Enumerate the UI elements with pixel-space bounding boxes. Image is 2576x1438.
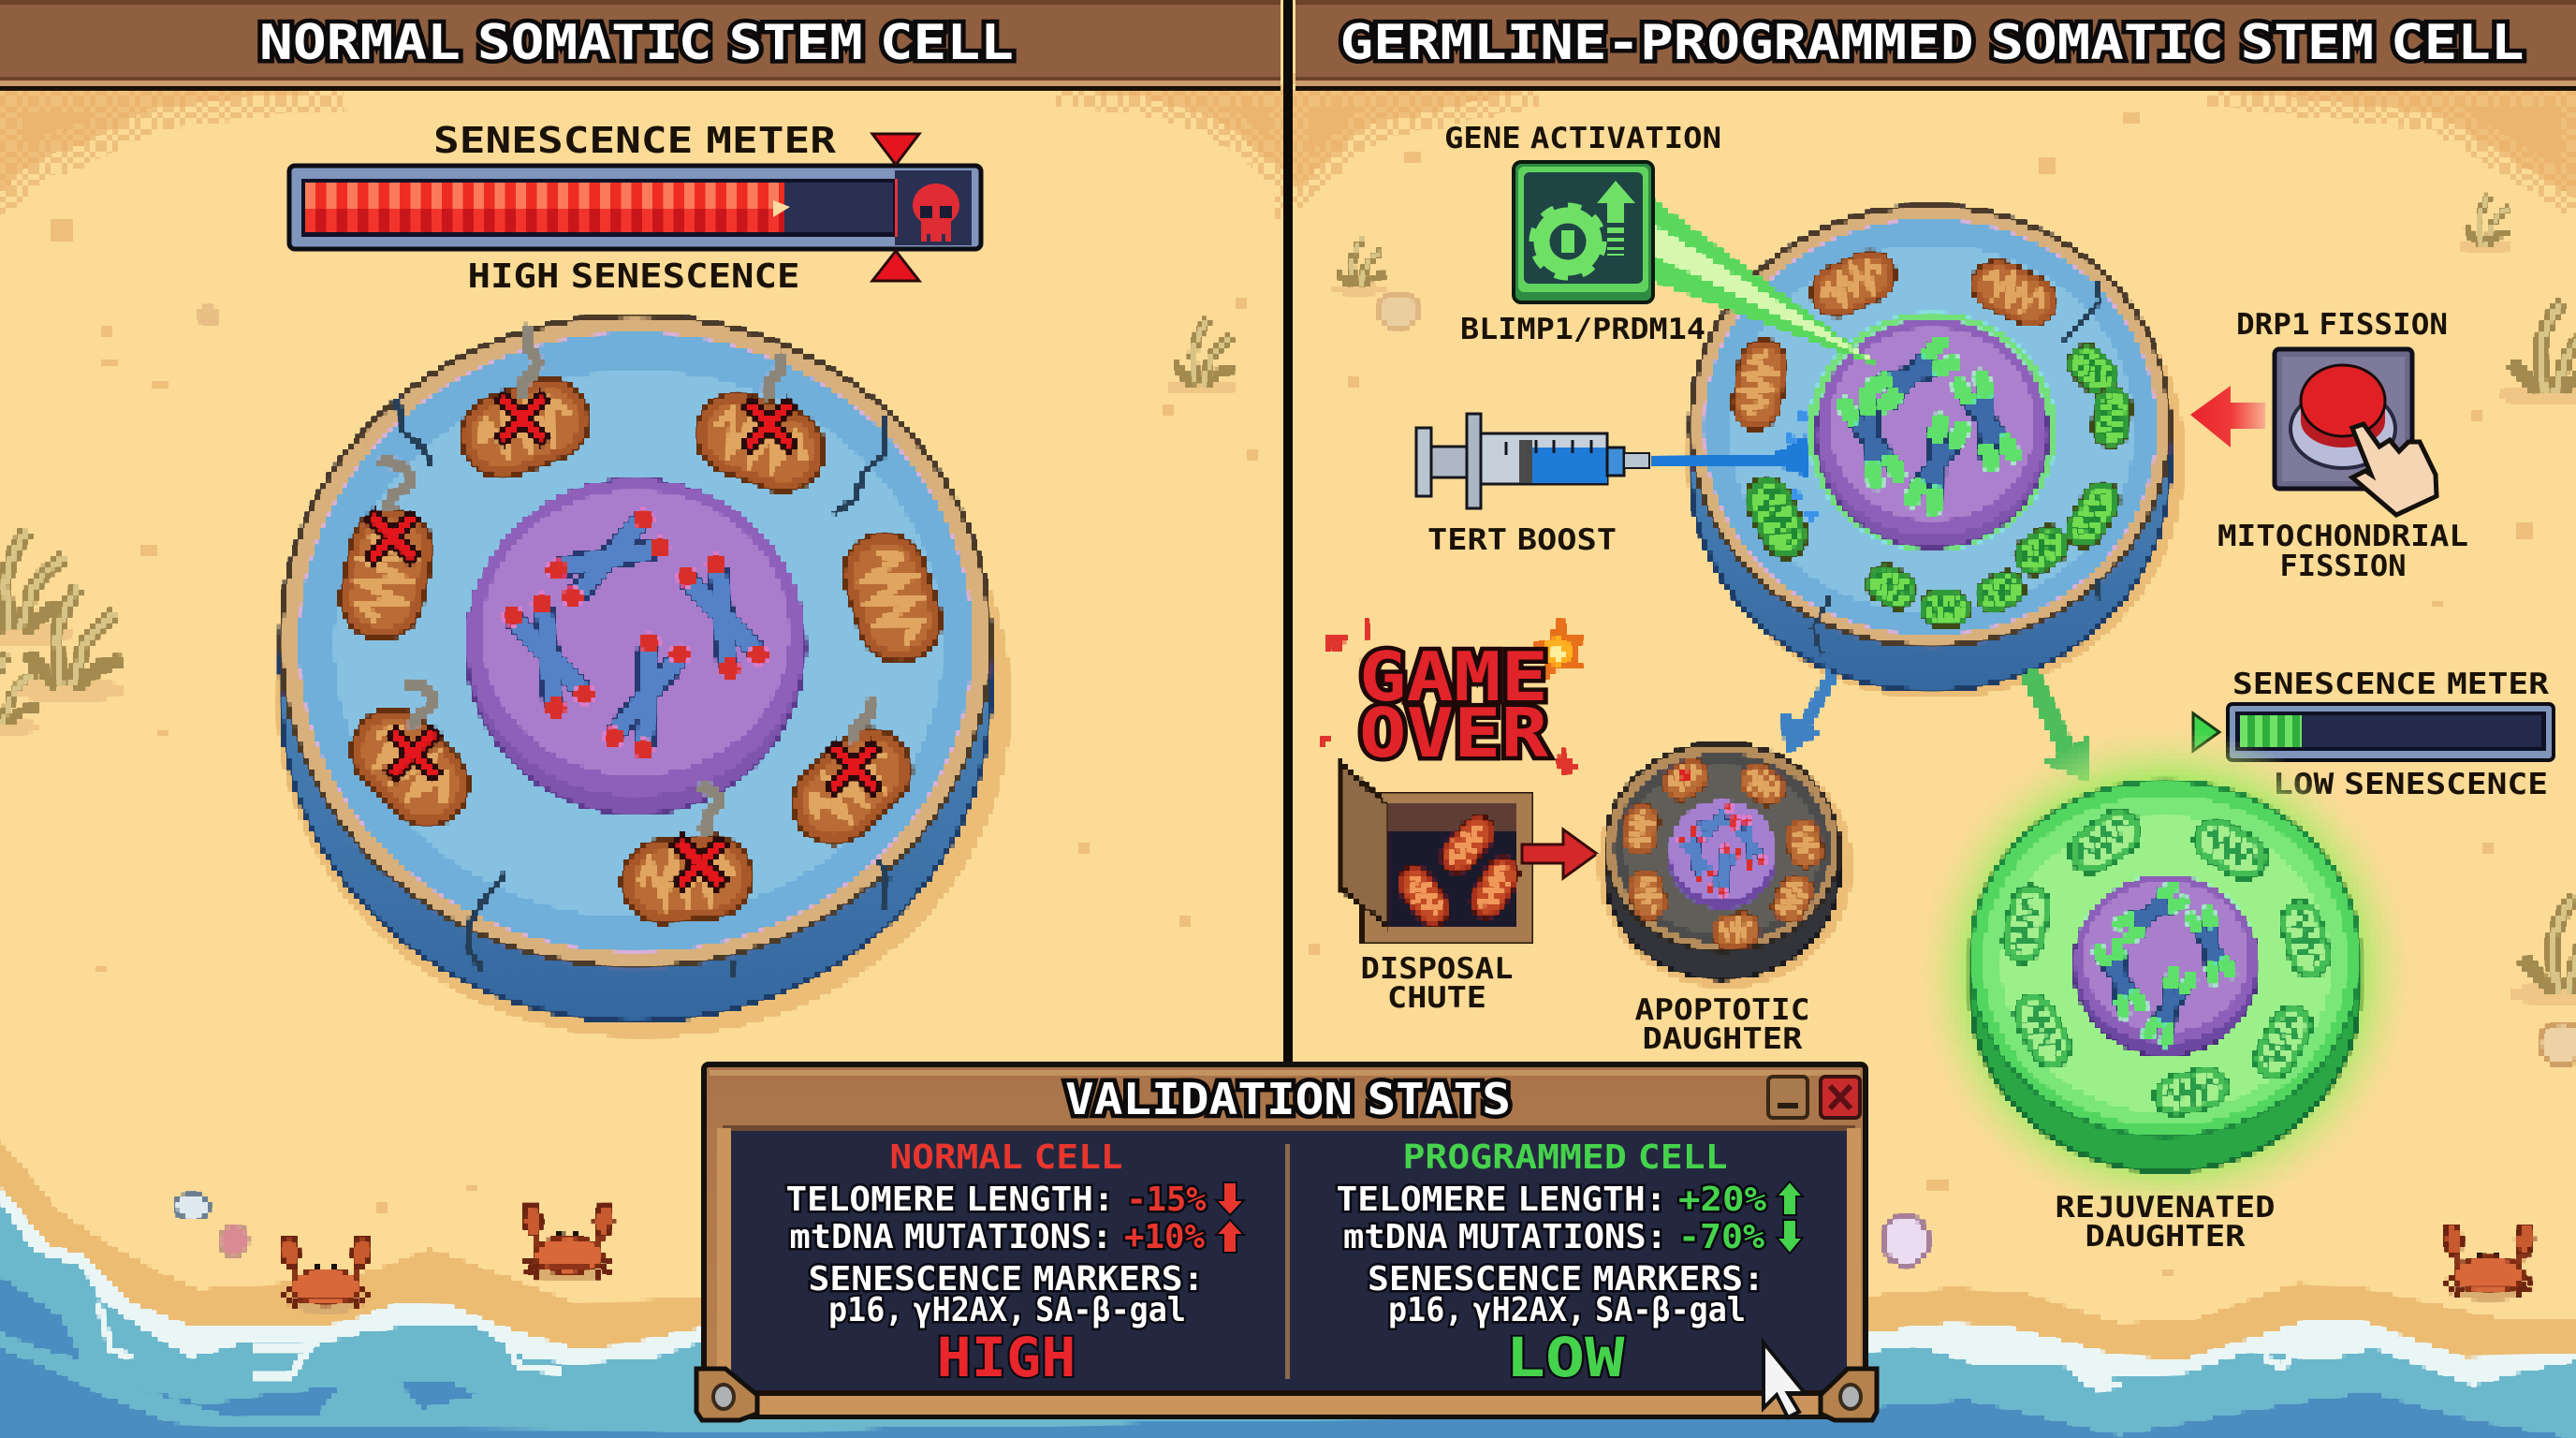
disposal chute: DISPOSAL: [1361, 952, 1513, 986]
game over burst: [1318, 614, 1586, 775]
apoptotic daughter cell: DAUGHTER: [1642, 1022, 1803, 1056]
rejuvenated daughter cell: DAUGHTER: [2086, 1220, 2246, 1254]
membrane cracks: [398, 397, 887, 979]
smoke: [378, 327, 872, 835]
arrow: fission: [2190, 386, 2265, 448]
stats: programmed cell: mtDNA MUTATIONS:: [1343, 1218, 1667, 1256]
chromosomes with long telomeres: [1844, 344, 2013, 508]
arrow: to apoptotic daughter: [1780, 670, 1838, 755]
stats: programmed cell: +20%: [1678, 1181, 1766, 1219]
crabs: [281, 1206, 2533, 1313]
stats: programmed cell: p16, γH2AX, SA-β-gal: [1388, 1291, 1746, 1329]
window buttons: [1768, 1077, 1860, 1118]
icon: TERT syringe: TERT BOOST: [1427, 523, 1617, 557]
senescence meter: low: SENESCENCE METER: [2232, 668, 2549, 701]
chip: [1514, 162, 1653, 302]
liquid stream: [1649, 412, 1817, 521]
icon: DRP1 fission button: [2190, 308, 2468, 583]
stats: normal cell: TELOMERE LENGTH:: [786, 1181, 1114, 1219]
stats: programmed cell: -70%: [1678, 1218, 1764, 1256]
nucleus: [466, 479, 805, 814]
stats: programmed cell: PROGRAMMED CELL: [1402, 1138, 1728, 1177]
stats: normal cell: +10%: [1124, 1218, 1205, 1256]
chromosomes: [499, 505, 772, 762]
corner bolts: [696, 1369, 1877, 1420]
stats: normal cell: SENESCENCE MARKERS:: [809, 1260, 1204, 1299]
grass tufts: [0, 195, 2576, 1005]
mitochondria: [1727, 242, 2133, 626]
stats: programmed cell: LOW: [1505, 1326, 1625, 1389]
stats screen: [731, 1131, 1847, 1390]
marker triangles: [872, 134, 919, 281]
nucleus with glow: [1808, 312, 2056, 551]
stats: normal cell: p16, γH2AX, SA-β-gal: [828, 1291, 1186, 1329]
stats: normal cell: NORMAL CELL: [889, 1138, 1123, 1177]
rejuvenated daughter cell: [1920, 728, 2410, 1254]
senescence meter: low: LOW SENESCENCE: [2273, 768, 2548, 801]
icon: DRP1 fission button: MITOCHONDRIAL: [2217, 520, 2468, 553]
senescence meter: high: [289, 120, 981, 296]
stats: normal cell: -15%: [1127, 1181, 1207, 1219]
arrow: chute to apoptotic daughter: [1522, 829, 1597, 878]
title banner: programmed: [1295, 0, 2576, 91]
disposal chute: [1342, 765, 1532, 1015]
failure crosses: [365, 391, 881, 890]
senescence meter: high: HIGH SENESCENCE: [468, 257, 799, 296]
icon: TERT syringe: [1416, 412, 1817, 557]
disposal chute: CHUTE: [1387, 981, 1486, 1015]
stats: programmed cell: TELOMERE LENGTH:: [1337, 1181, 1666, 1219]
icon: DRP1 fission button: FISSION: [2280, 550, 2406, 583]
title banner: normal: [0, 0, 1281, 91]
game over burst: GAME: [1359, 638, 1548, 716]
icon: DRP1 fission button: DRP1 FISSION: [2236, 308, 2448, 342]
title banner: programmed: GERMLINE-PROGRAMMED SOMATIC STEM CELL: [1340, 15, 2524, 71]
panel: validation stats window: [696, 1064, 1877, 1420]
beach decorations: grass, rocks and shells: [0, 195, 2576, 1313]
stats: normal cell: HIGH: [936, 1326, 1076, 1389]
icon: gene activation chip and beam: [1444, 122, 1881, 367]
mitochondria: [332, 367, 951, 927]
column divider: [1285, 1144, 1290, 1379]
arrow: to rejuvenated daughter: [2020, 667, 2091, 783]
beam: [1653, 199, 1881, 367]
diagram: programmed stem cell: [1687, 206, 2185, 698]
icon: skull: [913, 183, 959, 243]
apoptotic daughter cell: [1598, 743, 1852, 1056]
hand pointer: [2352, 424, 2437, 515]
apoptotic daughter cell: APOPTOTIC: [1634, 993, 1810, 1027]
rejuvenated daughter cell: REJUVENATED: [2056, 1191, 2275, 1225]
rocks and shells: [175, 294, 2576, 1265]
panel: germline-programmed somatic stem cell: [1295, 0, 2576, 1254]
icon: gene activation chip and beam: BLIMP1/PRDM14: [1460, 313, 1705, 346]
title banner: normal: NORMAL SOMATIC STEM CELL: [259, 15, 1014, 71]
senescence meter: low: [2193, 668, 2554, 801]
icon: gene activation chip and beam: GENE ACTIVATION: [1444, 122, 1721, 155]
window title: VALIDATION STATS: [1065, 1074, 1511, 1124]
center divider: [1283, 0, 1293, 1067]
stats: normal cell: mtDNA MUTATIONS:: [790, 1218, 1112, 1256]
diagram: damaged normal stem cell: [277, 315, 1011, 1037]
game over burst: OVER: [1359, 694, 1549, 772]
stats: normal cell: [786, 1138, 1244, 1389]
icon: mouse cursor: [1764, 1343, 1805, 1417]
window frame: [704, 1064, 1866, 1416]
senescence meter: high: SENESCENCE METER: [433, 120, 836, 161]
surf layers: [0, 1139, 2576, 1438]
stats: programmed cell: [1337, 1138, 1803, 1389]
panel: normal somatic stem cell: [0, 0, 1281, 1037]
stats: programmed cell: SENESCENCE MARKERS:: [1368, 1260, 1764, 1299]
